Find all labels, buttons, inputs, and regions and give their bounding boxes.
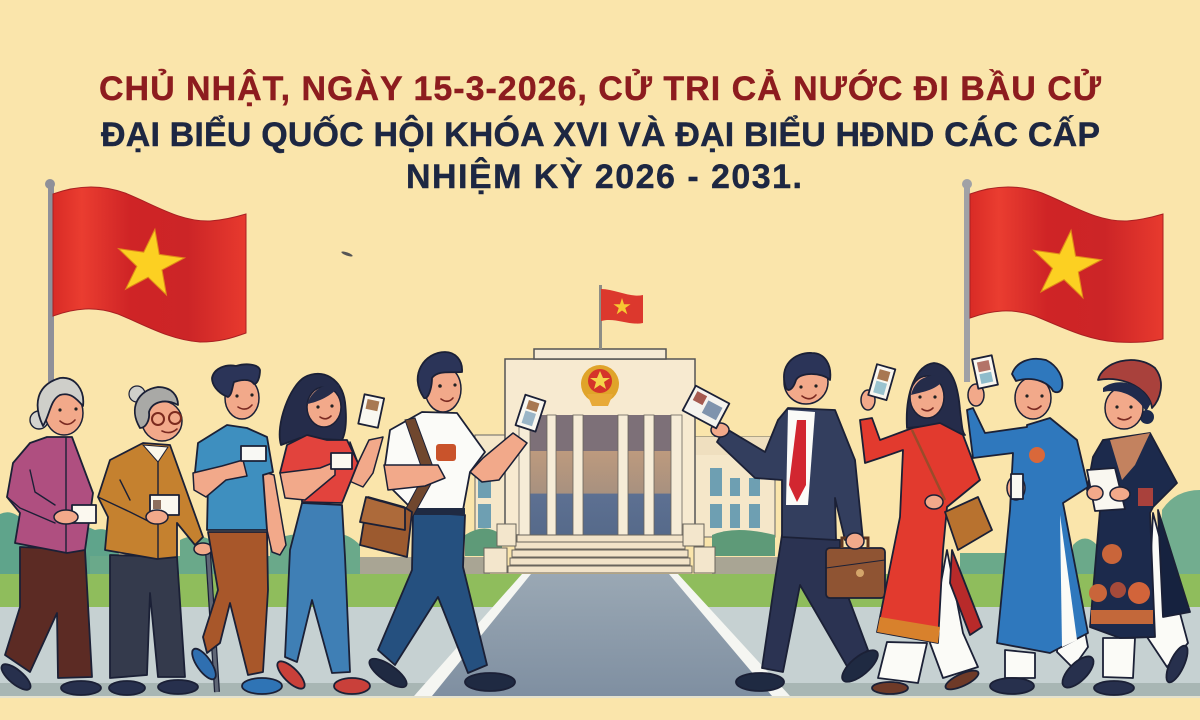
cardigan [98,443,203,559]
raised card [868,364,895,400]
emblem [581,365,619,406]
shirt [786,410,815,505]
right flag [962,179,1163,382]
face [1115,405,1119,409]
blouse [7,437,93,553]
shoes [465,673,515,691]
trousers [203,532,268,675]
raised card [358,394,384,428]
steps [508,535,692,573]
left flag [45,179,246,382]
pedestals [484,524,715,573]
title line 3: NHIỆM KỲ 2026 - 2031. [406,158,802,196]
white trousers [1005,517,1088,678]
briefcase [826,533,885,598]
forearm [193,460,247,497]
turban [1012,359,1062,392]
tie [789,420,806,502]
shoes [736,673,784,691]
headdress [1098,360,1161,408]
raised card [516,395,545,432]
card [150,495,179,515]
forearm [280,462,335,500]
building flag [599,285,643,349]
columns [519,415,682,535]
head [425,366,461,412]
face [235,394,239,398]
person: woman in red ao dai [860,363,992,694]
raised arm [347,437,383,487]
face [799,385,803,389]
glasses [152,412,181,425]
person: grandmother in pink [0,378,101,695]
hem [877,617,940,643]
note [1011,474,1023,499]
ao dai [860,418,980,643]
face [910,376,944,418]
back panel [1158,510,1190,617]
shoes [990,678,1034,694]
person: young woman in red T-shirt [273,374,384,694]
right arm [258,472,286,555]
shoes [109,681,145,695]
colonnade recess [528,415,682,535]
hand [711,423,729,437]
dress [1087,433,1177,638]
chest badge [436,444,456,461]
forearm [384,465,445,490]
cup card [72,505,96,523]
floral pattern [1089,544,1153,624]
card [241,446,266,461]
head [1105,387,1143,429]
face [58,408,62,412]
shoes [0,660,34,694]
title line 1: CHỦ NHẬT, NGÀY 15-3-2026, CỬ TRI CẢ NƯỚC ĐI BẦU CỬ [99,70,1102,108]
white trousers [1103,513,1188,678]
T-shirt [195,425,273,530]
person: man in blue ao dai [967,355,1099,694]
road [414,574,790,696]
sleeve line [7,438,66,552]
trousers [110,555,185,678]
jacket [717,408,863,540]
hand on cane [194,543,212,555]
trousers [5,547,92,678]
shirt [385,412,485,510]
shoes [273,657,309,693]
hand [968,384,984,406]
shoes [872,682,908,694]
attic [534,349,666,359]
handbag [945,497,992,550]
T-shirt [280,435,358,503]
building wings [465,435,775,556]
head [1015,377,1051,419]
strap [404,418,436,518]
cuff [1138,488,1153,506]
person: man in navy suit with briefcase [683,353,885,691]
paper [1087,468,1125,511]
title line 2: ĐẠI BIỂU QUỐC HỘI KHÓA XVI VÀ ĐẠI BIỂU HĐND CÁC CẤP [101,115,1100,154]
back panel [950,550,982,635]
robe slit [1060,515,1077,647]
blue robe [967,408,1088,653]
jeans [285,503,350,673]
shoulder bag [360,497,412,557]
face [307,387,341,427]
hand [925,495,943,509]
raised arm [470,433,527,482]
bun [1140,410,1154,424]
head [129,386,145,402]
head [30,411,48,429]
person: young man in blue T-shirt [188,364,286,694]
card [683,386,729,428]
shoes [1094,681,1134,695]
hair back [280,374,346,445]
hands [1087,486,1103,500]
white trousers [878,550,978,683]
raised card [972,355,998,389]
head [225,377,259,419]
person: man in white shirt with bag [360,352,545,692]
speck [341,250,353,258]
head [784,360,828,404]
face [438,384,442,388]
face [1025,394,1029,398]
collar scarf [1110,433,1150,480]
cup card [331,453,352,469]
cardigan lines [98,462,158,558]
person: grandmother in tan [98,386,217,695]
belt [413,508,465,515]
cane [208,552,217,692]
suit trousers [762,535,868,672]
strap [912,430,945,500]
mouth [162,429,177,433]
title [99,70,1102,196]
trousers [378,512,487,673]
robe badge [1029,447,1045,463]
shoes [188,645,220,683]
hair [907,363,965,435]
person: woman in dark traditional dress [1087,360,1192,695]
building [465,285,775,573]
ground and lawn [0,490,1200,698]
building main block [505,359,695,535]
